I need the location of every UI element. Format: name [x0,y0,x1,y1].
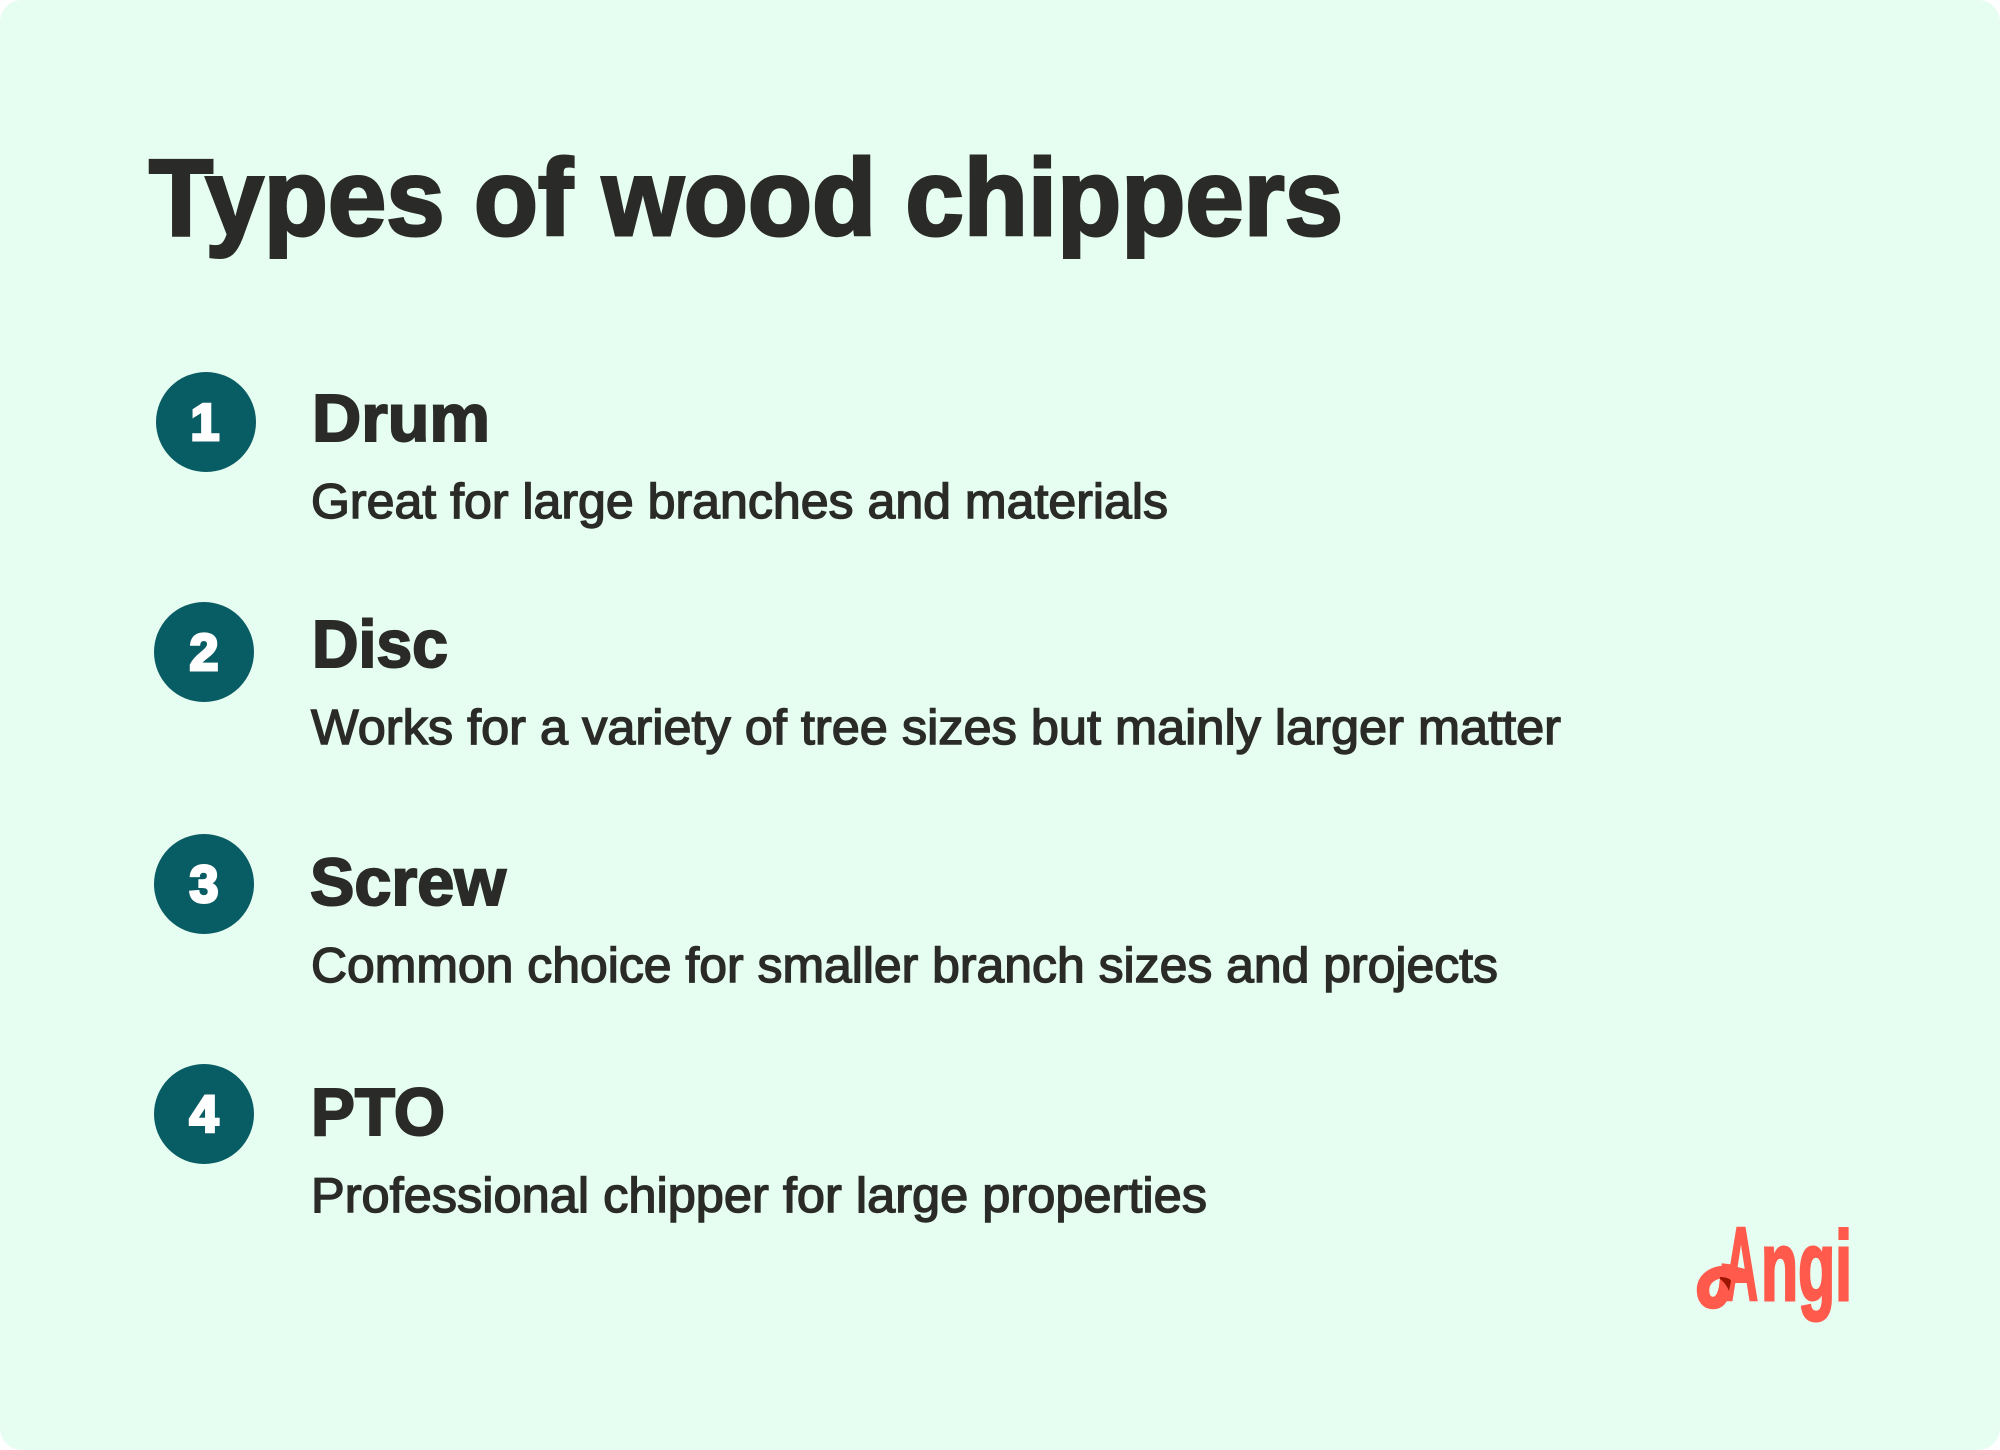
number badge 4: 4 [190,1086,219,1144]
logo: Angi: A [1724,1207,1758,1323]
number badge 2 [154,602,254,702]
description: Disc: Works for a variety of tree sizes but mainly larger matter [311,701,1561,755]
number badge 3 [154,834,254,934]
number badge 3: 3 [190,856,218,914]
heading: Disc: Disc [312,607,448,682]
title: Types of wood chippers [149,137,1343,259]
description: PTO: Professional chipper for large properties [311,1169,1207,1223]
list item: Drum [156,372,1168,529]
logo: Angi [1703,1207,1852,1323]
logo: Angi: ngi [1761,1211,1852,1321]
heading: Screw: Screw [310,845,507,920]
heading: PTO: PTO [311,1075,445,1150]
number badge 1 [156,372,256,472]
list item: Disc [154,602,1561,755]
heading: Drum: Drum [312,381,490,456]
number badge 4 [154,1064,254,1164]
description: Drum: Great for large branches and materials [311,475,1168,529]
list item: Screw [154,834,1498,993]
number badge 2: 2 [190,624,218,682]
list item: PTO [154,1064,1207,1223]
number badge 1: 1 [191,394,219,452]
description: Screw: Common choice for smaller branch sizes and projects [311,939,1498,993]
